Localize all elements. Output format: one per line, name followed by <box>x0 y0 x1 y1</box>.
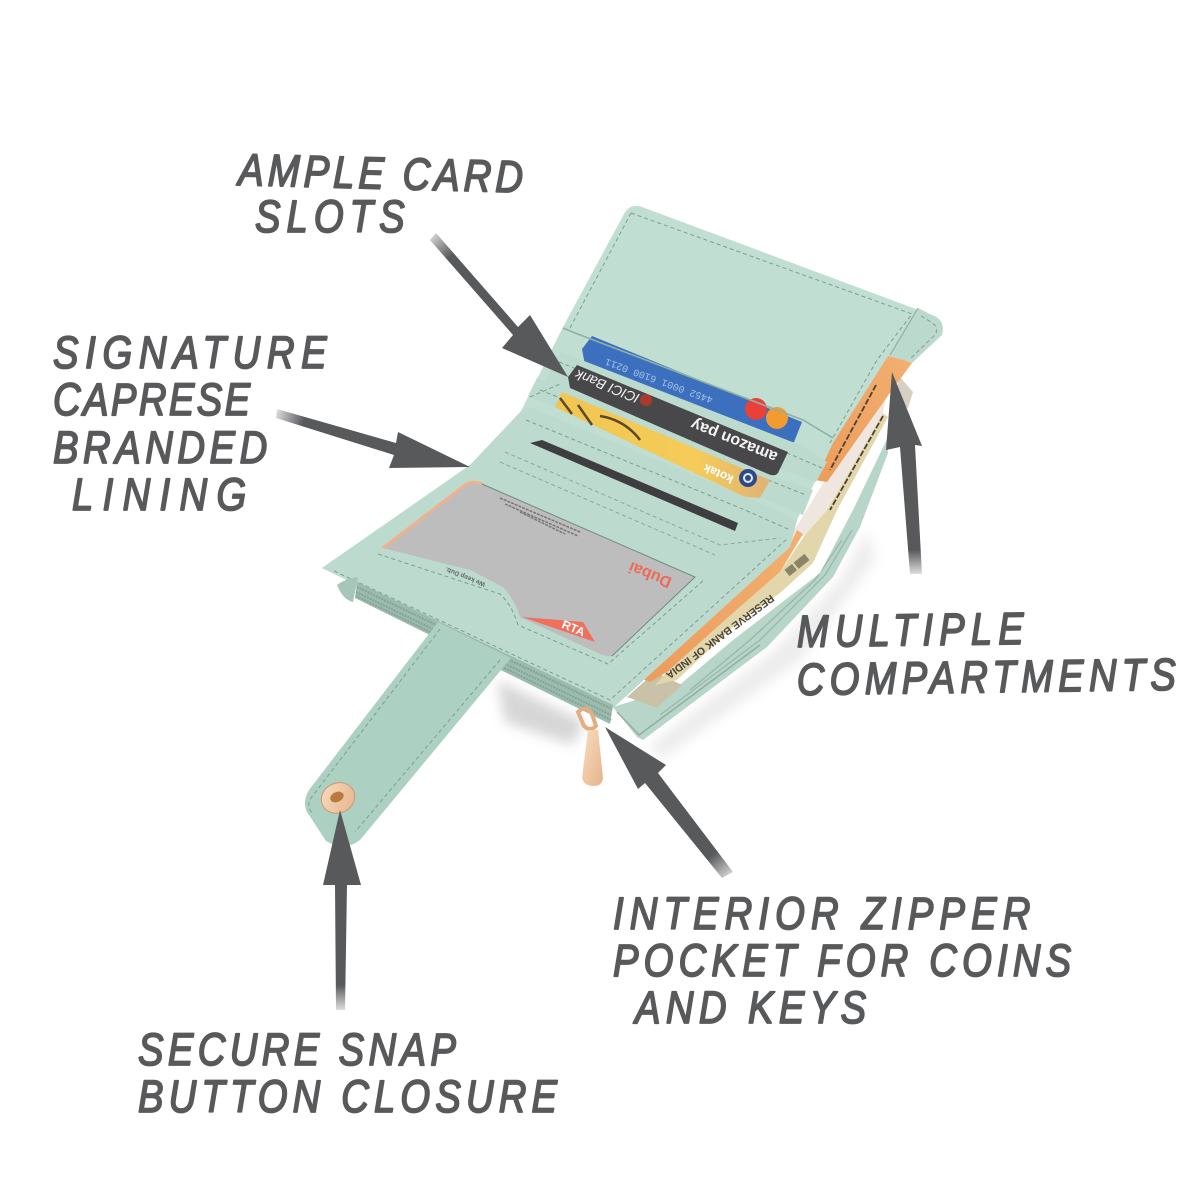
wallet photo <box>305 206 943 846</box>
banknotes <box>627 354 913 708</box>
RTA label: RTA <box>560 617 587 639</box>
label: zipper pocket: AND KEYS <box>632 982 866 1033</box>
label: zipper pocket <box>613 888 1071 1033</box>
blue card <box>582 336 802 445</box>
fourth pocket band <box>322 407 797 708</box>
arrow: zipper pocket <box>605 727 733 878</box>
upper flap stitching <box>570 213 912 443</box>
mastercard logo <box>745 398 788 429</box>
arrow: ample card slots <box>430 233 568 377</box>
third pocket band <box>528 378 813 515</box>
soft shadow <box>497 530 875 760</box>
label: snap closure <box>138 1024 558 1122</box>
window stitching <box>334 538 788 700</box>
ID window card <box>383 482 695 656</box>
label: signature lining: CAPRESE <box>53 374 251 425</box>
back quilted panel <box>613 435 888 740</box>
blue card: 4452 0001 6100 0211 <box>604 355 715 404</box>
zipper pull <box>578 708 603 786</box>
label: signature lining: BRANDED <box>53 422 267 473</box>
label: ample card slots: SLOTS <box>255 191 405 242</box>
card text: icici: ICICI Bank <box>572 366 642 407</box>
label: ample card slots <box>235 144 524 242</box>
label: signature lining: SIGNATURE <box>53 327 328 378</box>
label: snap closure: BUTTON CLOSURE <box>138 1071 558 1122</box>
top pocket edge <box>563 328 833 438</box>
small print: We keep Dub. <box>444 565 486 588</box>
wallet interior body <box>322 206 943 708</box>
zipper pocket <box>337 577 613 724</box>
yellow card <box>555 392 770 498</box>
card text: amazon pay: amazon pay <box>689 415 780 465</box>
note text: RESERVE BANK OF INDIA <box>663 592 776 681</box>
snap button <box>316 777 360 819</box>
red card mark: Dubai <box>627 558 674 590</box>
arrow: branded lining <box>276 409 470 468</box>
kotak label: kotak <box>701 461 736 486</box>
card slit <box>530 440 738 531</box>
second pocket band <box>545 352 827 482</box>
black card <box>568 365 788 475</box>
label: snap closure: SECURE SNAP <box>138 1024 456 1075</box>
strap <box>305 622 511 846</box>
label: zipper pocket: INTERIOR ZIPPER <box>613 888 1030 939</box>
label: multiple compartments: COMPARTMENTS <box>796 649 1176 705</box>
arrow: snap button <box>323 810 361 1010</box>
right edge strip <box>890 308 943 363</box>
label: zipper pocket: POCKET FOR COINS <box>613 935 1071 986</box>
arrow: multiple compartments <box>886 372 922 574</box>
label: multiple compartments <box>796 603 1176 705</box>
label: multiple compartments: MULTIPLE <box>796 603 1025 657</box>
label: signature lining <box>53 327 328 520</box>
label: ample card slots: AMPLE CARD <box>235 144 524 202</box>
label: signature lining: LINING <box>72 469 246 520</box>
